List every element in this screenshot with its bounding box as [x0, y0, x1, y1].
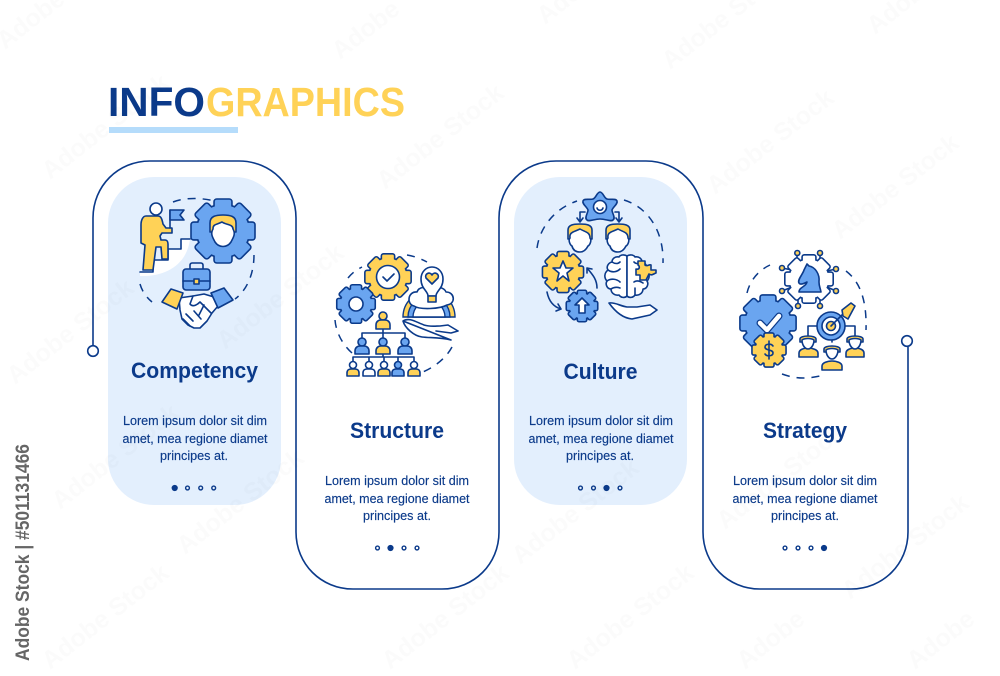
- text: culture: Lorem ipsum dolor sit dim: [529, 413, 673, 428]
- heading: culture: Culture: [564, 359, 638, 384]
- heading: competency: Competency: [131, 358, 259, 383]
- title underline: [109, 127, 238, 133]
- text: culture: amet, mea regione diamet: [528, 431, 674, 446]
- person: [363, 362, 375, 376]
- brain: [605, 255, 656, 297]
- flag: [170, 210, 184, 228]
- heading: strategy: Strategy: [763, 418, 848, 443]
- title: [108, 79, 405, 125]
- arrows to heads: [577, 212, 622, 222]
- person: [376, 312, 390, 329]
- rainbow, cloud and bulb: [403, 267, 455, 317]
- icon: strategy: [741, 250, 866, 378]
- yellow gear: [366, 255, 410, 299]
- head right: [606, 224, 630, 252]
- head left: [568, 224, 592, 252]
- star with face: [583, 192, 617, 221]
- pagination: strategy: [783, 546, 826, 550]
- pagination: competency: [172, 486, 216, 490]
- briefcase: [183, 263, 210, 290]
- person: [376, 338, 390, 354]
- text: culture: [528, 413, 674, 463]
- hand: [403, 320, 458, 340]
- text: strategy: principes at.: [771, 508, 839, 523]
- icon: culture: [537, 192, 663, 321]
- team person: [846, 336, 864, 357]
- text: strategy: Lorem ipsum dolor sit dim: [733, 473, 877, 488]
- stock id label: Adobe Stock | #501131466: [13, 444, 34, 661]
- text: competency: principes at.: [160, 448, 228, 463]
- connecting outline: [88, 161, 912, 589]
- text: structure: amet, mea regione diamet: [324, 491, 470, 506]
- blue gear with check: [741, 296, 795, 350]
- person: [408, 362, 420, 376]
- person: [378, 362, 390, 376]
- handshake: [162, 288, 233, 328]
- yellow gear with star: [543, 252, 583, 292]
- person: [398, 338, 412, 354]
- text: structure: principes at.: [363, 508, 431, 523]
- title: GRAPHICS: [206, 79, 405, 125]
- text: structure: [324, 473, 470, 523]
- text: competency: Lorem ipsum dolor sit dim: [123, 413, 267, 428]
- person: [347, 362, 359, 376]
- pagination: structure: [376, 546, 419, 550]
- blue gear: [338, 286, 374, 322]
- org chart: [347, 312, 420, 376]
- icon: structure: [335, 255, 458, 376]
- icon: competency: [140, 198, 254, 328]
- text: strategy: [732, 473, 878, 523]
- heading: structure: Structure: [350, 418, 444, 443]
- hand: [609, 303, 657, 319]
- title: INFO: [108, 79, 205, 125]
- text: culture: principes at.: [566, 448, 634, 463]
- yellow gear with dollar: [753, 334, 785, 366]
- blue gear with arrow: [567, 291, 597, 321]
- panel: competency background: [108, 177, 281, 505]
- text: structure: Lorem ipsum dolor sit dim: [325, 473, 469, 488]
- team person: [822, 346, 842, 370]
- circular arrows: [547, 268, 597, 311]
- team person: [799, 336, 818, 357]
- person: [355, 338, 369, 354]
- gear with head: [192, 200, 254, 262]
- text: competency: amet, mea regione diamet: [122, 431, 268, 446]
- text: competency: [122, 413, 268, 463]
- person: [392, 362, 404, 376]
- person climbing: [141, 203, 172, 270]
- pagination: culture: [579, 486, 622, 490]
- chess gear network: [780, 250, 838, 308]
- text: strategy: amet, mea regione diamet: [732, 491, 878, 506]
- panel: culture background: [514, 177, 687, 505]
- target with arrow and team links: [808, 303, 855, 342]
